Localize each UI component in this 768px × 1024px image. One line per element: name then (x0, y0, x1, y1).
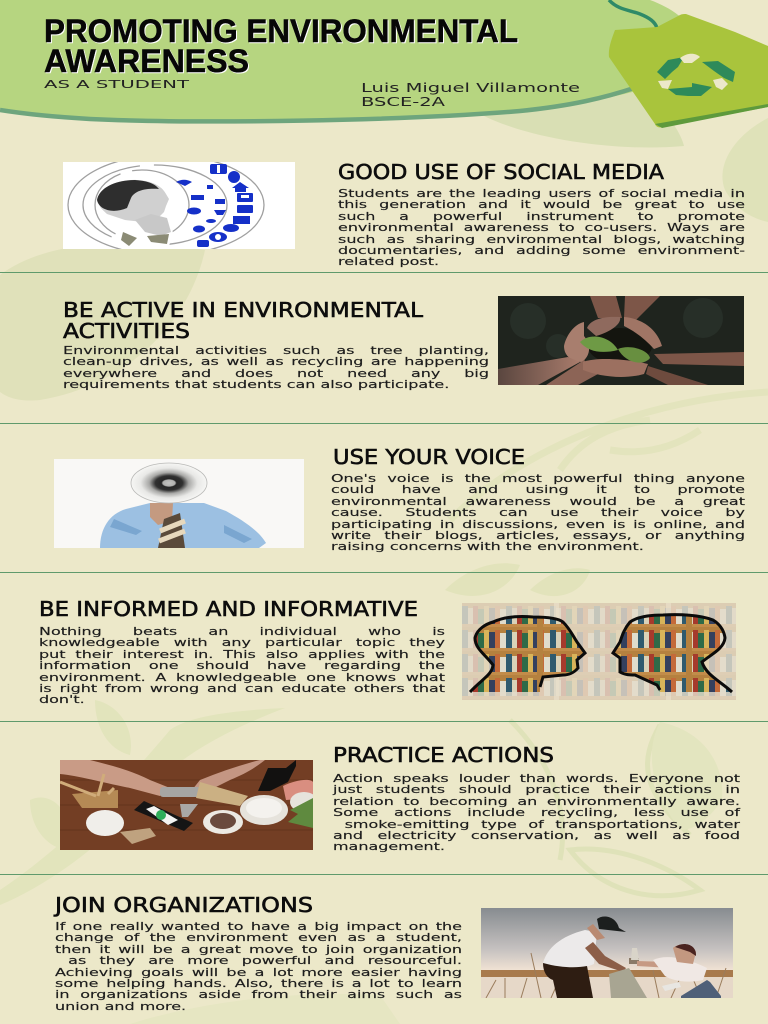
heading: PRACTICE ACTIONS (333, 743, 554, 767)
paragraph: relation to becoming an environmentally aware. (333, 796, 740, 808)
divider (0, 721, 768, 722)
panel: join organizations (53, 893, 733, 1013)
divider (0, 272, 768, 273)
paragraph (55, 921, 462, 1013)
divider (0, 423, 768, 424)
image: man surrounded by social media icons (63, 162, 295, 249)
paragraph: Some actions include recycling, less use of (333, 807, 740, 819)
panel: use your voice (54, 445, 745, 553)
heading (62, 298, 424, 343)
heading: USE YOUR VOICE (333, 445, 525, 469)
heading: BE INFORMED AND INFORMATIVE (39, 597, 418, 621)
title (44, 13, 518, 79)
heading: GOOD USE OF SOCIAL MEDIA (338, 160, 664, 184)
panel: practice actions (60, 743, 740, 853)
paragraph: in organizations aside from their aims such as (55, 989, 462, 1001)
paragraph: management. (333, 841, 445, 853)
paragraph: this generation and it would be great to use (338, 199, 745, 211)
paragraph: environmental awareness to co-users. Ways are (338, 222, 745, 234)
paragraph: put their interest in. This also applies with the (39, 649, 445, 661)
paragraph (332, 773, 740, 853)
author: Luis Miguel Villamonte (361, 81, 580, 95)
panel: good use of social media (63, 160, 745, 268)
paragraph: union and more. (55, 1001, 186, 1013)
subtitle: AS A STUDENT (44, 78, 189, 91)
paragraph: as they are more powerful and resourceful. (68, 955, 462, 967)
paragraph: such as sharing environmental blogs, watching (338, 234, 745, 246)
paragraph: such a powerful instrument to promote (338, 211, 745, 223)
paragraph: Environmental activities such as tree planting, (63, 345, 489, 357)
divider (0, 572, 768, 573)
author (361, 81, 580, 109)
paragraph: raising concerns with the environment. (331, 541, 644, 553)
paragraph: environmental awareness would be a great (331, 496, 745, 508)
title: PROMOTING ENVIRONMENTAL (44, 13, 518, 49)
image: eco-friendly items on a table (60, 760, 313, 850)
paragraph: is right from wrong and can educate others that (39, 683, 445, 695)
paragraph: write their blogs, articles, essays, or anything (331, 530, 745, 542)
paragraph: could have and using it to promote (331, 484, 745, 496)
paragraph: related post. (338, 256, 439, 268)
paragraph (63, 345, 489, 391)
paragraph: participating in discussions, even is is online, and (331, 519, 745, 531)
paragraph: environment. A knowledgeable one knows what (39, 672, 445, 684)
paragraph: smoke-emitting type of transportations, water (345, 819, 740, 831)
image: two volunteers collecting litter (481, 908, 733, 998)
paragraph: documentaries, and adding some environment- (338, 245, 745, 257)
image: two heads filled with bookshelves (462, 603, 736, 700)
paragraph (39, 626, 445, 706)
title: AWARENESS (44, 43, 249, 79)
paragraph: and electricity conservation, as well as food (333, 830, 740, 842)
header banner (0, 0, 679, 124)
image: hands around a seedling (498, 296, 744, 385)
heading: BE ACTIVE IN ENVIRONMENTAL (63, 298, 424, 322)
paragraph (331, 473, 745, 553)
paragraph: Action speaks louder than words. Everyone not (333, 773, 740, 785)
paragraph: Achieving goals will be a lot more easier having (55, 967, 462, 979)
paragraph: information one should have regarding the (39, 660, 445, 672)
paragraph: clean-up drives, as well as recycling are happening (63, 356, 489, 368)
heading: ACTIVITIES (63, 319, 190, 343)
banner shape (0, 0, 679, 124)
heading: JOIN ORGANIZATIONS (53, 893, 313, 917)
paragraph: requirements that students can also participate. (63, 379, 449, 391)
panel: be active in environmental activities (62, 296, 744, 391)
paragraph: Students are the leading users of social media in (338, 188, 745, 200)
paragraph: then it will be a great move to join organization (55, 944, 462, 956)
paragraph: some helping hands. Also, there is a lot to learn (55, 978, 462, 990)
paragraph: everywhere and does not need any big (63, 368, 489, 380)
paragraph: If one really wanted to have a big impact on the (55, 921, 462, 933)
paragraph: just students should practice their actions in (333, 784, 740, 796)
paragraph: One's voice is the most powerful thing anyone (331, 473, 745, 485)
paragraph (338, 188, 745, 268)
paragraph: cause. Students can use their voice by (331, 507, 745, 519)
author: BSCE-2A (361, 95, 446, 109)
paragraph: don't. (39, 694, 85, 706)
image: man with megaphone (54, 459, 304, 548)
paragraph: Nothing beats an individual who is (39, 626, 445, 638)
icon: recycle tag (608, 0, 768, 128)
divider (0, 874, 768, 875)
paragraph: knowledgeable with any particular topic they (39, 637, 445, 649)
paragraph: change of the environment even as a student, (55, 932, 462, 944)
panel: be informed and informative (39, 597, 736, 706)
